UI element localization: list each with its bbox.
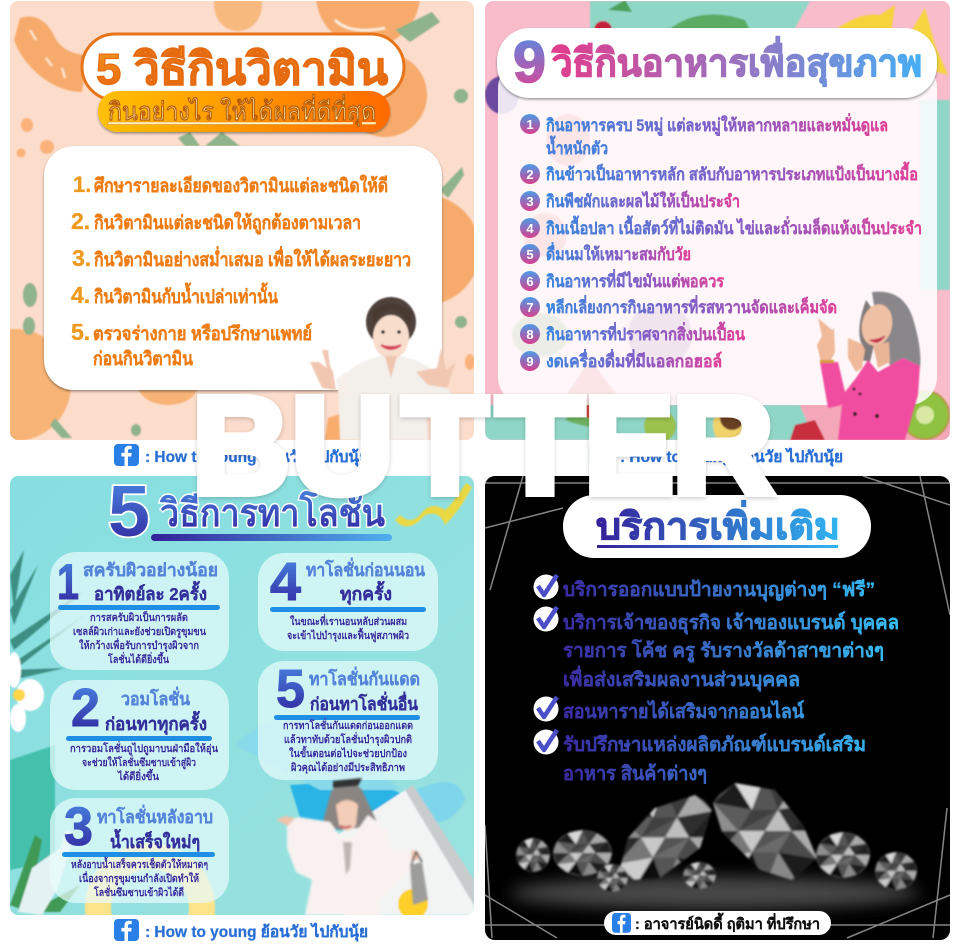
card 2: วอมโลชั่น (121, 686, 190, 709)
watermark: BUTTER: E (584, 369, 674, 523)
services list: บริการออกแบบป้ายงานบุญต่างๆ “ฟรี” (563, 578, 875, 602)
footer: facebook page (114, 919, 368, 942)
vitamin tips list: ตรวจร่างกาย หรือปรึกษาแพทย์ (93, 323, 312, 345)
card 3: โลชั่นซึมซาบเข้าผิวได้ดี (93, 884, 184, 899)
services list (563, 578, 899, 785)
panel: 5 ways to apply lotion (7, 472, 474, 950)
numbered food tips: กินพืชผักและผลไม้ให้เป็นประจำ (546, 189, 740, 211)
vitamin tips list: กินวิตามินกับน้ำเปล่าเท่านั้น (94, 282, 278, 308)
white list card (44, 146, 442, 390)
services list: บริการเจ้าของธุรกิจ เจ้าของแบรนด์ บุคคล (563, 611, 899, 635)
vitamin tips list: กินวิตามินแต่ละชนิดให้ถูกต้องตามเวลา (94, 211, 361, 235)
number badges: 2 (526, 167, 534, 182)
card 5 (258, 659, 438, 780)
vitamin tips list: 1. (73, 172, 91, 197)
services list: อาหาร สินค้าต่างๆ (563, 763, 707, 785)
card 3: 3 (64, 797, 93, 857)
numbered food tips: ดื่มนมให้เหมาะสมกับวัย (546, 242, 691, 264)
subtitle pill: กินอย่างไร ให้ได้ผลที่ดีที่สุด (108, 94, 376, 128)
card 2: การวอมโลชั่นถูไปถูมาบนฝ่ามือให้อุ่น (70, 740, 219, 756)
title pill: 9 ways: วิธีกินอาหารเพื่อสุขภาพ (551, 36, 922, 87)
number badges: 3 (526, 194, 534, 209)
translucent list card (498, 60, 937, 405)
card 4: 4 (270, 552, 301, 612)
number badges: 9 (526, 354, 534, 369)
card 4: ทุกครั้ง (340, 581, 392, 605)
card 3 (50, 797, 229, 903)
vitamin tips list: 3. (72, 245, 91, 271)
watermark: BUTTER: B (192, 369, 290, 523)
faint fruit shapes (512, 114, 692, 405)
card 2 (50, 678, 229, 790)
watermark: BUTTER (192, 369, 774, 523)
card 1: เซลล์ผิวเก่าและยังช่วยเปิดรูขุมขน (73, 625, 207, 639)
number badges: 1 (526, 117, 534, 132)
vitamin tips list: ศึกษารายละเอียดของวิตามินแต่ละชนิดให้ดี (94, 174, 388, 197)
watermark: BUTTER: T (496, 369, 584, 523)
card 3: น้ำเสร็จใหม่ๆ (110, 829, 200, 852)
title pill: 9 ways: 9 (513, 30, 546, 95)
card 4: จะเข้าไปบำรุงและฟื้นฟูสภาพผิว (287, 627, 409, 643)
footer pill: advisor page (604, 911, 831, 935)
title pill: 5 ways (82, 34, 404, 100)
card 5: ทาโลชั่นกันแดด (309, 666, 420, 689)
vitamin tips list: 5. (71, 319, 90, 345)
title: 5 ways to apply lotion (108, 472, 392, 552)
card 4 (258, 552, 438, 651)
footer: facebook page (114, 444, 368, 467)
card 1: อาทิตย์ละ 2ครั้ง (94, 581, 207, 604)
watermark: BUTTER: R (672, 369, 774, 523)
vitamin tips list: 2. (71, 208, 90, 234)
footer pill: advisor page: : อาจารย์นิดดี้ ฤติมา ที่ปรึกษา (635, 912, 820, 933)
footer: facebook page: : How to young ย้อนวัย ไปกับนุ้ย (620, 447, 843, 467)
services list: สอนหารายได้เสริมจากออนไลน์ (563, 700, 805, 723)
card 1: ให้กว้างเพื่อรับการบำรุงผิวจาก (79, 637, 199, 653)
card 4: ในขณะที่เรานอนหลับส่วนผสม (290, 613, 407, 628)
vitamin tips list: กินวิตามินอย่างสม่ำเสมอ เพื่อให้ได้ผลระยะยาว (94, 246, 411, 271)
services list: รายการ โค้ช ครู รับรางวัลด้าสาขาต่างๆ (563, 639, 884, 664)
services list: รับปรึกษาแหล่งผลิตภัณฑ์แบรนด์เสริม (563, 733, 866, 756)
vitamin tips list: 4. (71, 282, 90, 308)
card 5: ก่อนทาโลชั่นอื่น (310, 691, 418, 714)
vitamin tips list (71, 172, 411, 370)
number badges: 4 (526, 221, 534, 236)
panel: 9 ways to eat healthily (485, 0, 950, 467)
numbered food tips: กินอาหารที่มีไขมันแต่พอควร (546, 269, 725, 291)
panel: 5 ways to take vitamins (0, 0, 480, 467)
footer: facebook page: : How to young ย้อนวัย ไปกับนุ้ย (145, 447, 368, 467)
number badges: 7 (526, 300, 534, 315)
numbered food tips: น้ำหนักตัว (546, 135, 608, 158)
title: 5 ways to apply lotion: 5 (108, 472, 150, 552)
title pill: 5 ways: 5 วิธีกินวิตามิน (96, 45, 388, 94)
card 5: แล้วทาทับด้วยโลชั่นบำรุงผิวปกติ (284, 731, 412, 747)
card 2: ได้ดียิ่งขึ้น (117, 768, 160, 783)
numbered food tips: กินอาหารครบ 5หมู่ แต่ละหมู่ให้หลากหลายและหมั่นดูแล (546, 113, 888, 137)
vitamin tips list: ก่อนกินวิตามิน (93, 349, 193, 370)
number badges: 5 (526, 247, 534, 262)
card 5: ผิวคุณได้อย่างมีประสิทธิภาพ (290, 761, 405, 775)
number badges (520, 114, 540, 371)
title pill: additional services (563, 495, 871, 558)
card 3: เนื่องจากรูขุมขนกำลังเปิดทำให้ (79, 870, 199, 886)
presenter photo 1 (310, 297, 456, 440)
numbered food tips: หลีกเลี่ยงการกินอาหารที่รสหวานจัดและเค็มจัด (546, 295, 837, 317)
card 5: การทาโลชั่นกันแดดก่อนออกแดด (283, 717, 413, 732)
card 2: จะช่วยให้โลชั่นซึมซาบเข้าสู่ผิว (82, 754, 196, 770)
diamonds (516, 775, 917, 892)
footer: facebook page (589, 444, 843, 467)
presenter photo 3 (276, 778, 428, 915)
card 4: ทาโลชั่นก่อนนอน (306, 557, 425, 580)
presenter photo 2 (817, 292, 920, 440)
title pill: additional services: บริการเพิ่มเติม (596, 500, 840, 547)
watermark: BUTTER: U (291, 369, 394, 523)
watermark: BUTTER: T (402, 369, 488, 523)
card 1 (50, 552, 229, 670)
card 2: ก่อนทาทุกครั้ง (105, 711, 207, 735)
card 1: โลชั่นได้ดียิ่งขึ้น (107, 651, 170, 666)
card 5: ในขั้นตอนต่อไปจะช่วยปกป้อง (289, 745, 407, 760)
card 1: สครับผิวอย่างน้อย (83, 560, 218, 580)
card 3: หลังอาบน้ำเสร็จควรเช็ดตัวให้หมาดๆ (71, 856, 208, 871)
footer: facebook page: : How to young ย้อนวัย ไปกับนุ้ย (145, 922, 368, 942)
numbered food tips: กินอาหารที่ปราศจากสิ่งปนเปื้อน (546, 321, 745, 344)
checklist icons (534, 574, 558, 754)
title: 5 ways to apply lotion: วิธีการทาโลชั่น (159, 486, 385, 535)
card 5: 5 (276, 659, 305, 719)
subtitle pill (98, 91, 390, 132)
card 1: การสครับผิวเป็นการผลัด (90, 610, 188, 624)
panel: additional services (485, 476, 950, 940)
card 1: 1 (57, 554, 79, 610)
number badges: 6 (526, 274, 534, 289)
numbered food tips: งดเครื่องดื่มที่มีแอลกอฮอล์ (546, 349, 722, 371)
numbered food tips (546, 113, 922, 371)
card 3: ทาโลชั่นหลังอาบ (97, 804, 213, 827)
card 2: 2 (71, 678, 100, 738)
title pill: 9 ways (497, 28, 937, 98)
services list: เพื่อส่งเสริมผลงานส่วนบุคคล (563, 665, 800, 692)
number badges: 8 (526, 327, 534, 342)
